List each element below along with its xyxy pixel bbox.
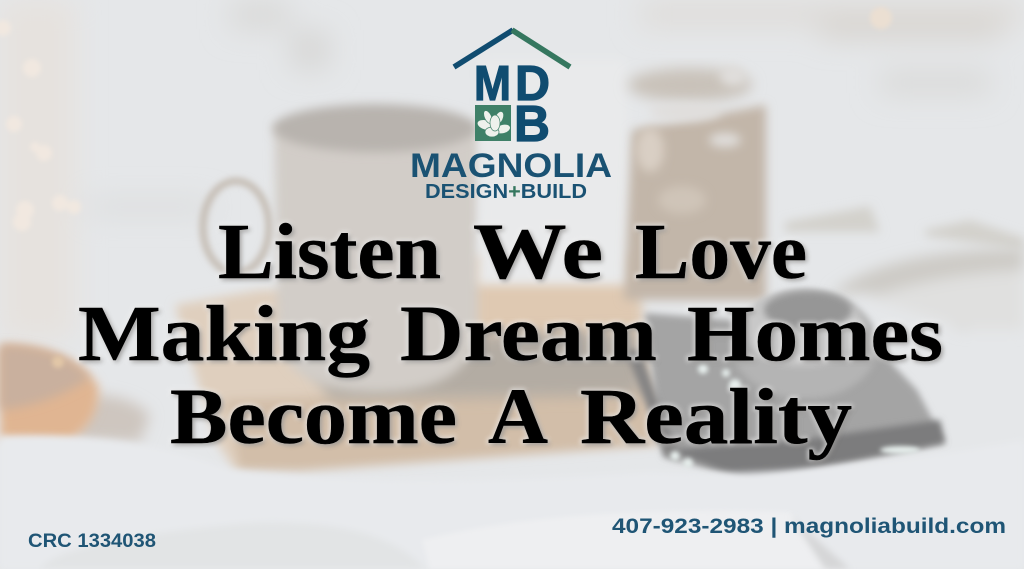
B monogram: B [514, 95, 550, 152]
headline line 1: Listen [218, 209, 441, 296]
mug body [274, 125, 478, 392]
headline shadow: Making [80, 293, 372, 380]
headline shadow: We [475, 211, 605, 298]
wooden tray [175, 255, 660, 471]
headline line 1: We [473, 209, 603, 296]
headline glow: Become [170, 374, 457, 461]
headline glow: We [473, 209, 603, 296]
logo [410, 30, 612, 203]
MD monogram [474, 57, 550, 111]
headline line 2: Making [78, 291, 370, 378]
orange bowl [0, 345, 150, 442]
right saucer [830, 248, 1024, 330]
company name: MAGNOLIA [410, 147, 612, 185]
headline shadow: Become [172, 376, 459, 463]
headline line 3 [170, 374, 852, 461]
contact details: 407-923-2983 | magnoliabuild.com [612, 515, 1006, 538]
headline glow: Homes [687, 291, 943, 378]
headline glow: Listen [218, 209, 441, 296]
headline line 2: Dream [400, 291, 657, 378]
headline shadow: A [490, 376, 550, 463]
magnolia flower tile [475, 105, 511, 141]
headline line 3: A [488, 374, 548, 461]
headline glow: A [488, 374, 548, 461]
MD monogram: M [474, 57, 511, 111]
headline line 2 [78, 291, 943, 378]
headline line 3: Reality [580, 374, 852, 461]
fairy lights [0, 7, 892, 231]
headline shadow: Love [637, 211, 809, 298]
headline shadow: Dream [402, 293, 659, 380]
mug [203, 104, 478, 392]
open book [0, 436, 1024, 569]
headline line 1: Love [635, 209, 807, 296]
headline shadow: Listen [220, 211, 443, 298]
headline shadow [80, 211, 945, 463]
right book page [422, 511, 830, 569]
distant table edges [785, 206, 1024, 250]
headline glow: Love [635, 209, 807, 296]
licence number: CRC 1334038 [28, 531, 156, 552]
headline [78, 209, 945, 463]
headline glow: Reality [580, 374, 852, 461]
roof icon [454, 30, 570, 67]
headline line 1 [218, 209, 807, 296]
MD monogram: D [515, 57, 550, 111]
camera lens [732, 291, 878, 399]
left book page [40, 523, 425, 569]
glass jar [624, 66, 766, 300]
mug handle [203, 181, 269, 273]
camera body [645, 313, 945, 480]
white card [478, 60, 632, 285]
headline line 2: Homes [687, 291, 943, 378]
mug opening [273, 104, 477, 152]
headline shadow: Homes [689, 293, 945, 380]
camera [625, 290, 945, 480]
headline shadow: Reality [582, 376, 854, 463]
company subtitle: DESIGN +BUILD [425, 181, 587, 203]
headline glow [78, 209, 943, 461]
headline line 3: Become [170, 374, 457, 461]
bowl shadow [70, 395, 150, 442]
camera highlights [670, 364, 920, 468]
headline glow: Dream [400, 291, 657, 378]
headline glow: Making [78, 291, 370, 378]
